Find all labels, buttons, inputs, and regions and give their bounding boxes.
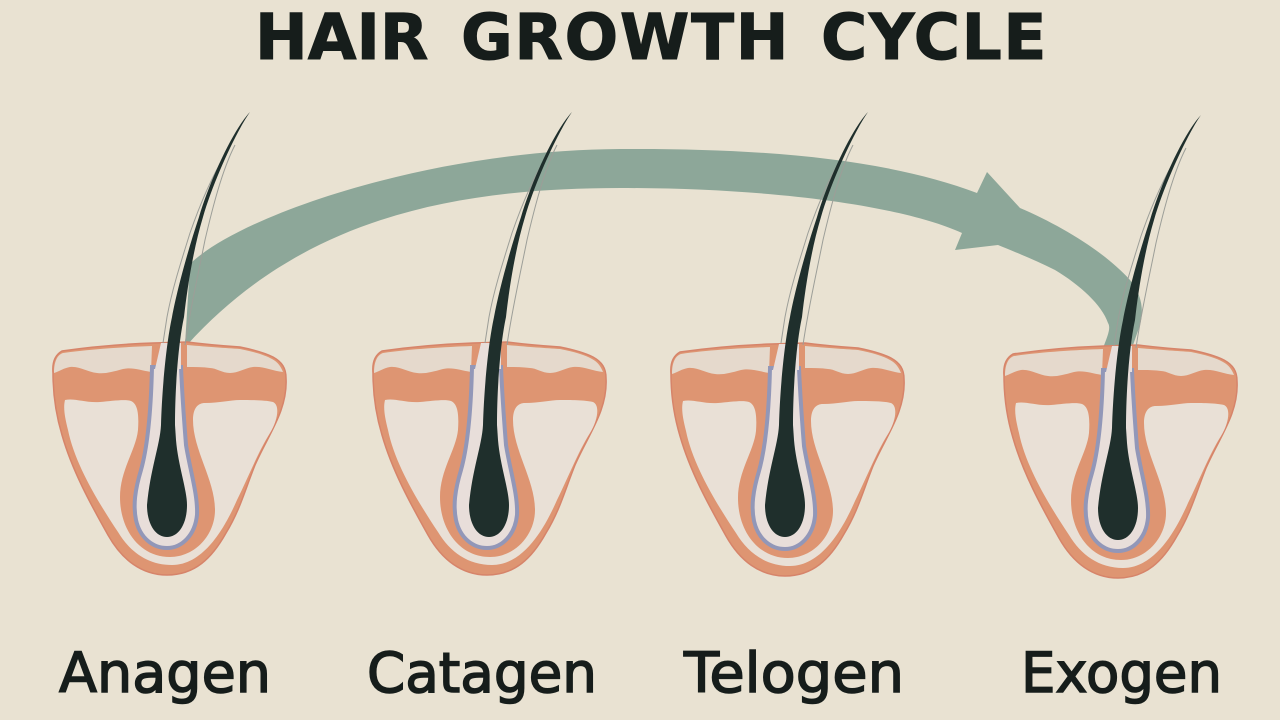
- arrow: cycle progression: [185, 149, 1142, 348]
- label: Catagen: Catagen: [367, 641, 597, 705]
- title: CYCLE: [821, 1, 1048, 74]
- title: HAIR: [255, 1, 428, 74]
- title: GROWTH: [461, 1, 790, 74]
- label: Anagen: Anagen: [59, 641, 271, 705]
- follicle: Anagen: [53, 112, 286, 575]
- follicle: Telogen: [671, 112, 904, 576]
- follicle: Exogen: [1004, 115, 1237, 578]
- follicle: Catagen: [373, 112, 606, 575]
- label: Exogen: Exogen: [1021, 641, 1222, 705]
- label: Telogen: Telogen: [683, 641, 904, 705]
